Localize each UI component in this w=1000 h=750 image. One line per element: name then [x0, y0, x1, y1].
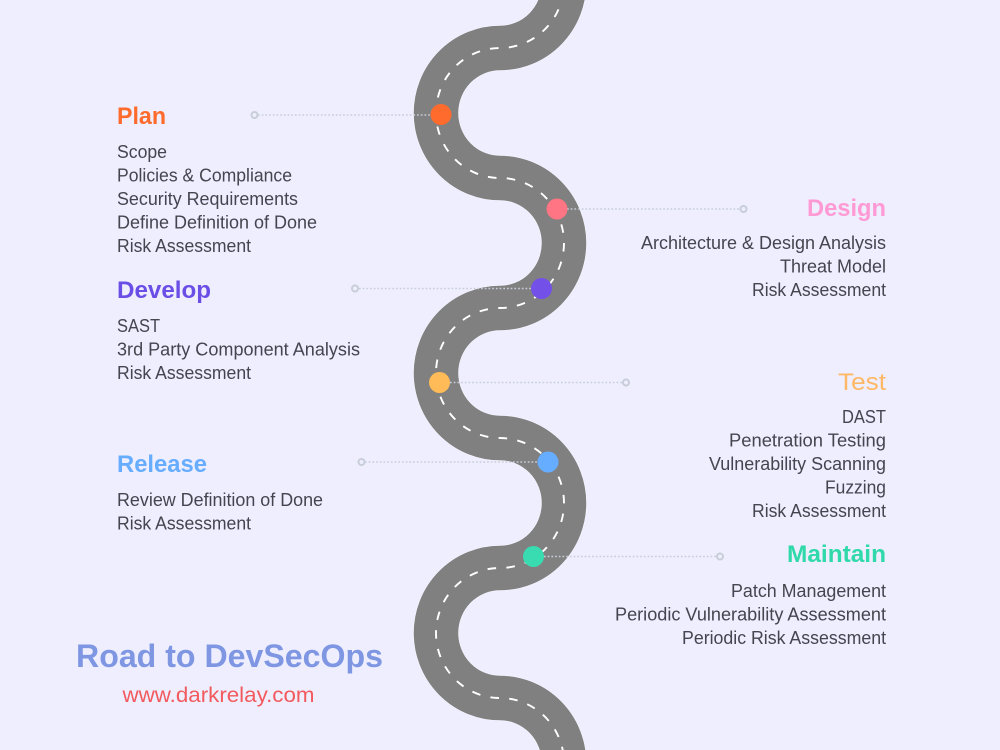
title: Road to DevSecOps	[76, 638, 383, 674]
heading: Maintain: Maintain	[787, 541, 886, 568]
panel: Design	[641, 195, 886, 300]
list: Plan items: Risk Assessment	[117, 236, 251, 256]
panel: Develop	[117, 277, 360, 383]
list: Develop items	[117, 316, 360, 383]
list: Design items: Architecture & Design Analysis	[641, 233, 886, 253]
list: Test items: Penetration Testing	[729, 430, 886, 450]
list: Test items: Risk Assessment	[752, 501, 886, 521]
list: Develop items: SAST	[117, 316, 160, 336]
list: Maintain items: Periodic Vulnerability Assessment	[615, 604, 886, 624]
list: Design items	[641, 233, 886, 300]
list: Develop items: 3rd Party Component Analysis	[117, 340, 360, 360]
panel: Maintain	[615, 541, 886, 648]
list: Plan items: Define Definition of Done	[117, 212, 317, 232]
panel: Plan	[117, 103, 317, 256]
list: Maintain items: Periodic Risk Assessment	[682, 628, 886, 648]
panel: Test	[709, 369, 886, 521]
list: Plan items: Scope	[117, 142, 167, 162]
connector: Maintain	[544, 554, 723, 560]
heading: Develop: Develop	[117, 277, 211, 304]
marker: Plan	[430, 104, 452, 125]
list: Release items: Risk Assessment	[117, 514, 251, 534]
list: Design items: Threat Model	[780, 256, 886, 276]
list: Release items: Review Definition of Done	[117, 490, 323, 510]
list: Test items: Fuzzing	[825, 478, 886, 498]
winding road	[436, 0, 564, 750]
connector: Develop	[352, 286, 531, 292]
connector: Plan	[252, 112, 431, 118]
list: Design items: Risk Assessment	[752, 280, 886, 300]
heading: Plan: Plan	[117, 103, 166, 130]
list: Test items: DAST	[842, 407, 886, 427]
list: Plan items: Security Requirements	[117, 189, 298, 209]
connector: Test	[450, 380, 629, 386]
list: Release items	[117, 490, 323, 534]
marker: Develop	[531, 278, 552, 299]
list: Maintain items: Patch Management	[731, 581, 886, 601]
list: Test items	[709, 407, 886, 521]
heading: Design: Design	[807, 195, 886, 222]
website url: www.darkrelay.com	[121, 684, 315, 707]
panel: Release	[117, 451, 323, 534]
connector: Design	[567, 206, 746, 212]
marker: Maintain	[523, 546, 544, 567]
marker: Design	[546, 198, 568, 220]
list: Test items: Vulnerability Scanning	[709, 454, 886, 474]
heading: Release: Release	[117, 451, 207, 478]
list: Plan items	[117, 142, 317, 256]
heading: Test: Test	[838, 369, 886, 396]
list: Develop items: Risk Assessment	[117, 363, 251, 383]
marker: Test	[429, 372, 450, 393]
list: Maintain items	[615, 581, 886, 648]
connector: Release	[358, 459, 538, 465]
list: Plan items: Policies & Compliance	[117, 166, 292, 186]
marker: Release	[538, 452, 558, 472]
